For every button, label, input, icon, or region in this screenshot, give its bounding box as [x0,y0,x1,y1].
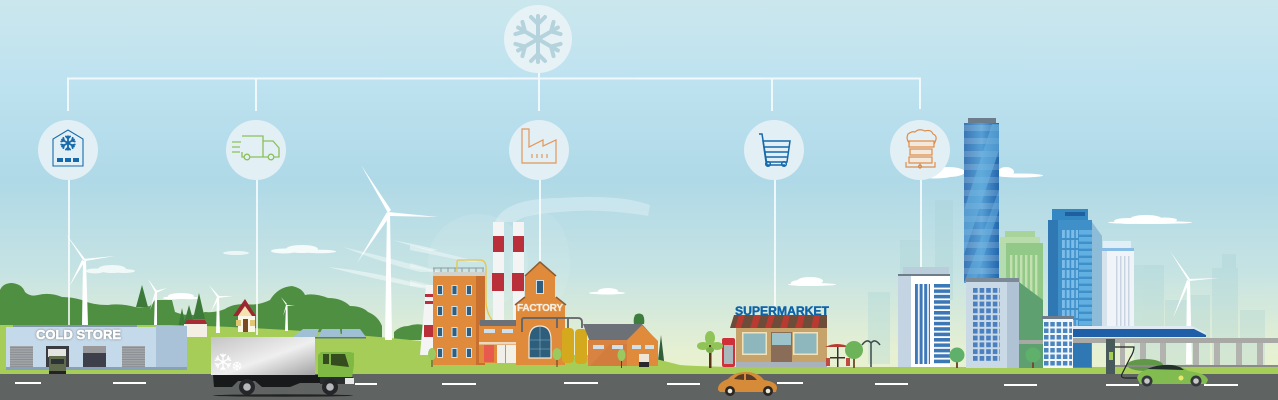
small chimney [420,285,433,355]
connector block [479,320,516,363]
building A [898,267,950,367]
road [0,374,1278,400]
supermarket [730,304,830,367]
main hall [515,262,566,365]
tree line [0,283,665,369]
connector lines [67,72,922,335]
factory sign: FACTORY [517,303,563,314]
top snowflake badge [504,5,572,73]
supermarket sign: SUPERMARKET [735,304,830,318]
icon: delivery truck [226,120,286,180]
wind turbines [66,165,1219,364]
factory complex [420,222,658,368]
EV charger and green car [1106,339,1208,386]
warehouse [583,324,658,367]
orange car [718,372,777,396]
tall glass tower [964,118,999,283]
icon: cold store [38,120,98,180]
wind streaks and factory smoke [328,197,650,312]
icon: factory [509,120,569,180]
cold store sign: COLD STORE [36,327,121,342]
small truck at dock [48,349,66,374]
icon: shopping cart [744,120,804,180]
white tower [1100,241,1134,331]
clouds [86,167,1192,300]
houses [184,299,256,337]
building B [966,278,1019,368]
solar panels [293,329,366,338]
elevated rail and train [1019,326,1278,371]
green tower [996,231,1043,368]
building C [1042,316,1074,368]
refrigerated truck [211,337,354,397]
skyscraper cluster [898,118,1134,368]
city trees [950,348,1040,368]
grass [0,325,1278,374]
factory trees [428,348,626,368]
brick building [433,260,492,365]
tall chimneys [492,222,524,322]
cold store building [6,325,187,374]
pipes and tanks [522,318,587,364]
road markings [15,382,1238,386]
distant skyline [868,200,1265,365]
street furniture [697,331,880,368]
blue tower [1048,209,1102,368]
icon: cloud server [890,120,950,180]
